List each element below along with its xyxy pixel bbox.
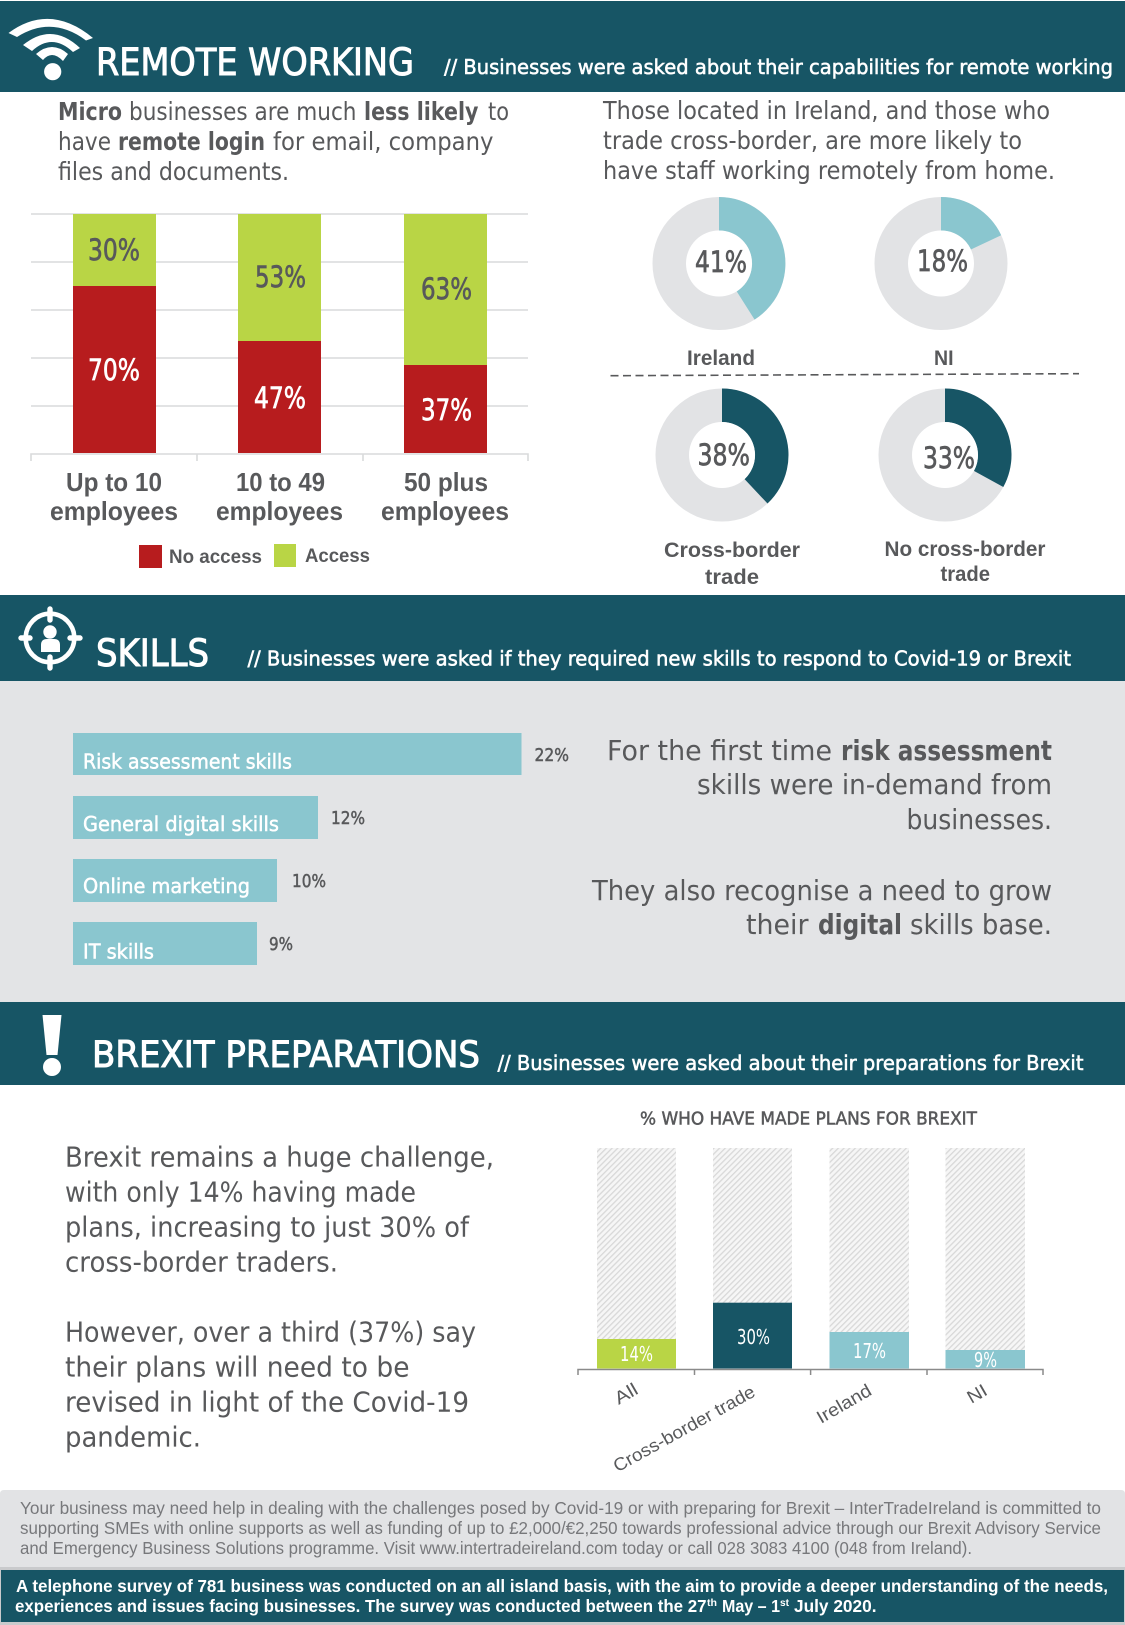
subheading: Brexit question: // Businesses were asked about their preparations for Brexit xyxy=(498,1051,1084,1075)
text block: Ireland and cross-border: have staff working remotely from home. xyxy=(603,156,1055,185)
icon: wifi xyxy=(8,19,93,80)
panel: survey note: experiences and issues facing businesses. The survey was conducted between the 27 xyxy=(15,1596,706,1616)
text block: skills commentary: They also recognise a need to grow xyxy=(591,875,1052,907)
rotated category labels: Ireland xyxy=(813,1380,875,1427)
text block: Brexit commentary: plans, increasing to just 30% of xyxy=(65,1212,470,1244)
text block: Ireland and cross-border xyxy=(602,96,1055,185)
panel background: skills xyxy=(0,680,1125,1003)
text block: Ireland and cross-border: trade cross-border, are more likely to xyxy=(603,126,1022,155)
text block: Brexit commentary: their plans will need to be xyxy=(65,1352,410,1384)
bar: IT skills: 9% xyxy=(269,935,293,955)
bar: Cross-border trade 30% xyxy=(713,1148,792,1368)
bar: 10 to 49 employees: 47% xyxy=(254,381,306,415)
text block: skills commentary: their xyxy=(746,909,809,941)
text block: Brexit commentary: Brexit remains a huge challenge, xyxy=(65,1142,494,1174)
panel: survey note: May – 1 xyxy=(722,1596,780,1616)
donut: Ireland 41%: Ireland xyxy=(687,346,755,370)
text block: micro businesses: to xyxy=(488,97,509,126)
bar: 10 to 49 employees: 53% xyxy=(255,260,306,294)
donut: no cross-border trade 33%: No cross-border xyxy=(884,537,1046,561)
bar: All 14%: 14% xyxy=(620,1342,653,1366)
header: skills xyxy=(0,595,1125,681)
category labels: Up to 10 xyxy=(66,467,162,497)
donut: no cross-border trade 33%: 33% xyxy=(923,441,975,475)
bar: general digital skills: General digital skills xyxy=(83,812,279,836)
panel: survey note xyxy=(0,1567,1125,1625)
text block: micro businesses: for email, company xyxy=(273,127,494,156)
panel: help and support: and Emergency Business Solutions programme. Visit www.intertradeireland.com today or call 028 3083 4100 (048 from Ireland). xyxy=(20,1538,972,1558)
panel: help and support: Your business may need help in dealing with the challenges posed by Covid-19 or with preparing for Brexit – InterTradeIreland is committed to xyxy=(20,1498,1101,1518)
rotated category labels xyxy=(610,1379,991,1476)
header: remote working xyxy=(0,1,1125,92)
panel: survey note: July 2020. xyxy=(794,1596,876,1616)
bar: 10 to 49 employees xyxy=(238,214,321,453)
bar: up to 10 employees: 30% xyxy=(88,233,140,267)
rotated category labels: NI xyxy=(963,1380,991,1407)
stacked bar chart: remote login access by size xyxy=(31,214,528,568)
header: Brexit preparations xyxy=(0,1002,1125,1085)
bar: risk assessment skills: Risk assessment skills xyxy=(83,750,292,774)
legend: Access xyxy=(305,545,370,567)
donut: cross-border trade 38% xyxy=(656,388,801,589)
bar: online marketing xyxy=(73,859,326,902)
icon: exclamation mark xyxy=(42,1015,62,1076)
bar: Cross-border trade 30%: 30% xyxy=(737,1325,770,1349)
text block: Brexit commentary: revised in light of the Covid-19 xyxy=(65,1386,469,1418)
text block: skills commentary: businesses. xyxy=(906,804,1052,836)
bar: IT skills xyxy=(73,922,293,965)
bar: risk assessment skills: 22% xyxy=(534,746,569,766)
panel: survey note: st xyxy=(780,1598,790,1609)
heading: skills: SKILLS xyxy=(96,632,209,675)
donut: NI 18%: NI xyxy=(934,346,954,370)
text block: skills commentary: skills base. xyxy=(910,909,1052,941)
category labels: employees xyxy=(50,496,178,526)
category labels: employees xyxy=(381,496,509,526)
text block: micro businesses: remote login xyxy=(118,127,265,156)
heading: Brexit preparations: BREXIT PREPARATIONS xyxy=(92,1033,480,1076)
bar: up to 10 employees xyxy=(73,214,156,453)
text block: micro businesses: have xyxy=(58,127,111,156)
text block: skills commentary: For the first time xyxy=(607,735,832,767)
text block: micro businesses: files and documents. xyxy=(58,157,289,186)
bar: IT skills: IT skills xyxy=(83,940,154,964)
bar: All 14% xyxy=(597,1148,676,1368)
bar: 50 plus employees: 63% xyxy=(421,272,472,306)
icon: target with person xyxy=(21,609,80,668)
text block: Brexit commentary: cross-border traders. xyxy=(65,1246,338,1278)
bar: NI 9%: 9% xyxy=(974,1348,997,1372)
text block: Brexit commentary: pandemic. xyxy=(65,1422,201,1454)
donut: cross-border trade 38%: 38% xyxy=(698,438,750,472)
bar: 50 plus employees: 37% xyxy=(421,393,472,427)
donut: NI 18% xyxy=(874,197,1008,370)
chart title: % WHO HAVE MADE PLANS FOR BREXIT xyxy=(640,1110,977,1130)
donut: NI 18%: 18% xyxy=(917,244,968,278)
panel: help and support: supporting SMEs with online supports as well as funding of up to £2,000/€2,250 towards professional advice through our Brexit Advisory Service xyxy=(20,1518,1101,1538)
panel: help and support xyxy=(0,1490,1125,1567)
text block: micro businesses: less likely xyxy=(364,97,479,126)
category labels: 50 plus xyxy=(404,467,488,497)
category labels: 10 to 49 xyxy=(236,467,325,497)
donut: Ireland 41% xyxy=(652,197,786,370)
text block: Brexit commentary: However, over a third (37%) say xyxy=(65,1316,476,1348)
legend xyxy=(139,544,370,568)
donut: Ireland 41%: 41% xyxy=(695,245,747,279)
subheading: remote working question: // Businesses were asked about their capabilities for remote working xyxy=(444,55,1113,79)
rotated category labels: All xyxy=(611,1379,641,1408)
donut: cross-border trade 38%: Cross-border xyxy=(664,538,801,562)
rotated category labels: Cross-border trade xyxy=(610,1381,758,1476)
text block: Brexit commentary: with only 14% having made xyxy=(65,1176,416,1208)
bar: up to 10 employees: 70% xyxy=(88,353,140,387)
text block: micro businesses: Micro xyxy=(58,97,122,126)
text block: skills commentary: digital xyxy=(818,909,902,941)
heading: remote working: REMOTE WORKING xyxy=(96,41,414,84)
text block: skills commentary xyxy=(591,735,1052,941)
legend: No access xyxy=(169,546,262,568)
text block: skills commentary: risk assessment xyxy=(841,735,1052,767)
text block: skills commentary: skills were in-demand from xyxy=(697,769,1052,801)
text block: micro businesses xyxy=(58,97,509,186)
donut: no cross-border trade 33%: trade xyxy=(940,562,990,586)
subheading: skills question: // Businesses were asked if they required new skills to respond to Covid-19 or Brexit xyxy=(248,646,1071,670)
bar: general digital skills: 12% xyxy=(331,809,365,829)
panel: survey note: A telephone survey of 781 business was conducted on an all island basis, with the aim to provide a deeper understanding of the needs, xyxy=(16,1576,1108,1596)
donut: no cross-border trade 33% xyxy=(878,388,1046,586)
bar: online marketing: 10% xyxy=(292,872,326,892)
category labels: employees xyxy=(216,496,343,526)
bar: NI 9% xyxy=(946,1148,1025,1372)
bar: 50 plus employees xyxy=(404,214,487,453)
bar: general digital skills xyxy=(73,796,365,839)
donut: cross-border trade 38%: trade xyxy=(705,565,759,589)
bar chart: percent who have made plans for Brexit xyxy=(578,1110,1043,1476)
text block: Ireland and cross-border: Those located in Ireland, and those who xyxy=(602,96,1050,125)
bar: Ireland 17% xyxy=(830,1148,909,1368)
bar: online marketing: Online marketing xyxy=(83,874,250,898)
bar: Ireland 17%: 17% xyxy=(853,1339,886,1363)
bar: risk assessment skills xyxy=(73,733,569,775)
text block: micro businesses: businesses are much xyxy=(129,97,356,126)
text block: Brexit commentary xyxy=(65,1142,494,1454)
panel: survey note: th xyxy=(707,1598,717,1609)
category labels xyxy=(50,467,509,526)
bar chart: skills required xyxy=(73,733,569,965)
